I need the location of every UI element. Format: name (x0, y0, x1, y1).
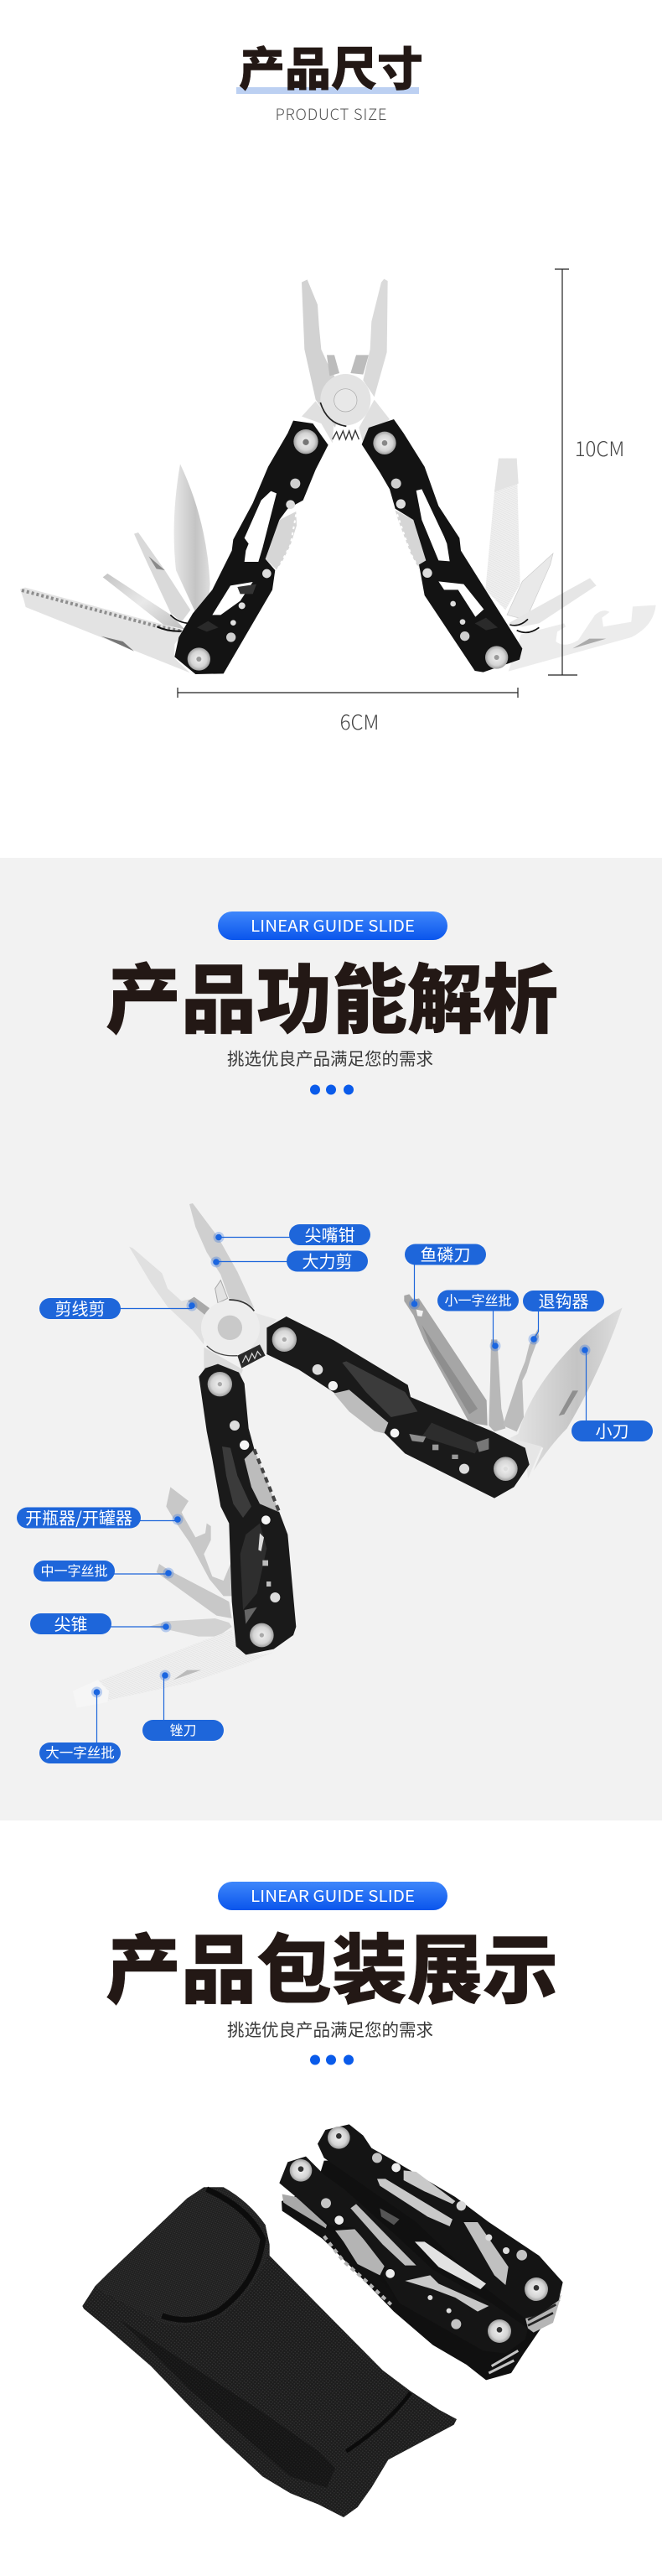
right handle (362, 419, 522, 673)
three dots (310, 2054, 354, 2064)
upper tools (404, 1294, 623, 1478)
callout: 尖嘴钳 (213, 1222, 370, 1246)
pill badge: LINEAR GUIDE SLIDE (251, 914, 415, 937)
callout: 尖嘴钳: 尖嘴钳 (305, 1222, 355, 1246)
callout: 鱼磷刀 (405, 1241, 486, 1310)
dimension: height 10CM: 10CM (575, 433, 624, 462)
subheading: 挑选优良产品满足您的需求 (227, 1045, 433, 1070)
callout: 鱼磷刀: 鱼磷刀 (421, 1241, 471, 1266)
callout: 大一字丝批 (39, 1687, 121, 1763)
callout: 小刀 (571, 1345, 653, 1442)
right tools (485, 459, 656, 672)
vertical handle (199, 1364, 296, 1654)
callout: 尖锥: 尖锥 (54, 1611, 87, 1635)
heading: 产品功能解析 (106, 939, 558, 1048)
pill badge (218, 911, 447, 940)
tool layers at the end (489, 2295, 561, 2373)
callout: 退钩器: 退钩器 (538, 1288, 588, 1312)
callout: 开瓶器/开罐器 (17, 1504, 183, 1530)
panel: function analysis (0, 858, 662, 1820)
callout: 大力剪 (211, 1248, 368, 1273)
title underline (236, 87, 419, 94)
callout: 中一字丝批 (34, 1560, 174, 1581)
callout: 大一字丝批: 大一字丝批 (45, 1742, 115, 1762)
three dots (310, 1085, 354, 1095)
dimension: height 10CM (548, 269, 624, 675)
dimension: width 6CM: 6CM (340, 706, 379, 735)
title: product size: 产品尺寸 (239, 32, 423, 99)
front handle (279, 2157, 528, 2354)
nylon pouch (82, 2187, 457, 2517)
panel: product size (0, 0, 662, 858)
callout: 剪线剪 (39, 1296, 198, 1320)
callout: 大力剪: 大力剪 (302, 1248, 352, 1273)
multitool illustration, open with dimensions (20, 279, 656, 674)
callout: 锉刀: 锉刀 (169, 1719, 197, 1739)
heading: 产品包装展示 (106, 1909, 558, 2018)
callout: 尖锥 (30, 1611, 171, 1635)
callout: 锉刀 (142, 1670, 224, 1741)
horizontal handle (266, 1317, 530, 1498)
closed multitool (279, 2124, 563, 2380)
dark backing between handles (282, 2161, 560, 2380)
pill badge: LINEAR GUIDE SLIDE (251, 1884, 415, 1907)
lower-left tools (73, 1487, 274, 1708)
callout: 退钩器 (523, 1288, 604, 1345)
callout: 剪线剪: 剪线剪 (55, 1296, 106, 1320)
multitool illustration, annotated (73, 1203, 623, 1708)
dimension: width 6CM (178, 688, 518, 735)
subtitle: PRODUCT SIZE (275, 103, 387, 125)
left handle (174, 421, 328, 674)
jaws and head (129, 1203, 277, 1377)
back handle (318, 2124, 563, 2319)
callout: 小刀: 小刀 (595, 1418, 628, 1442)
callout: 中一字丝批: 中一字丝批 (40, 1560, 108, 1580)
pill badge (218, 1882, 447, 1910)
callout: 小一字丝批: 小一字丝批 (444, 1290, 512, 1310)
left tools (20, 464, 210, 673)
pliers head and jaws (302, 279, 390, 443)
panel: packaging display (0, 1820, 662, 2576)
callout: 开瓶器/开罐器: 开瓶器/开罐器 (25, 1504, 132, 1530)
subheading: 挑选优良产品满足您的需求 (227, 2016, 433, 2041)
callout: 小一字丝批 (437, 1290, 519, 1352)
